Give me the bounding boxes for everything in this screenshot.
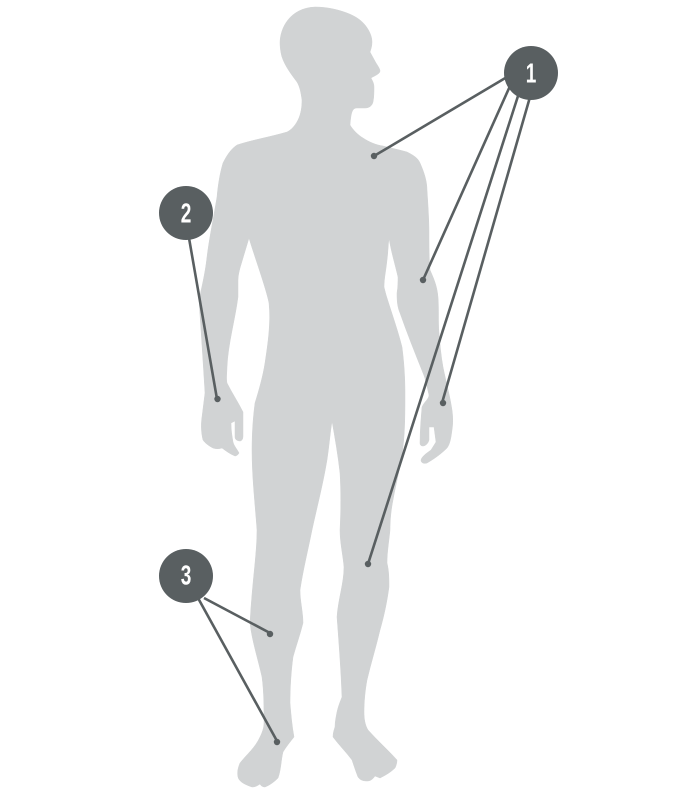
callout 1: endpoint dots [365, 153, 446, 567]
callout 2: numbered badge: 2 [181, 198, 191, 230]
callout 1: numbered badge: 1 [526, 58, 536, 90]
callout 2: leader line and dot [189, 238, 221, 402]
callout 1: numbered badge [504, 46, 558, 100]
callout 2: numbered badge [159, 186, 213, 240]
callout 3: numbered badge: 3 [181, 560, 191, 592]
callout 3: numbered badge [159, 549, 213, 603]
human body silhouette [199, 7, 453, 787]
callout 1: leader lines [368, 77, 530, 564]
callout 3: leader lines and dots [198, 598, 280, 745]
